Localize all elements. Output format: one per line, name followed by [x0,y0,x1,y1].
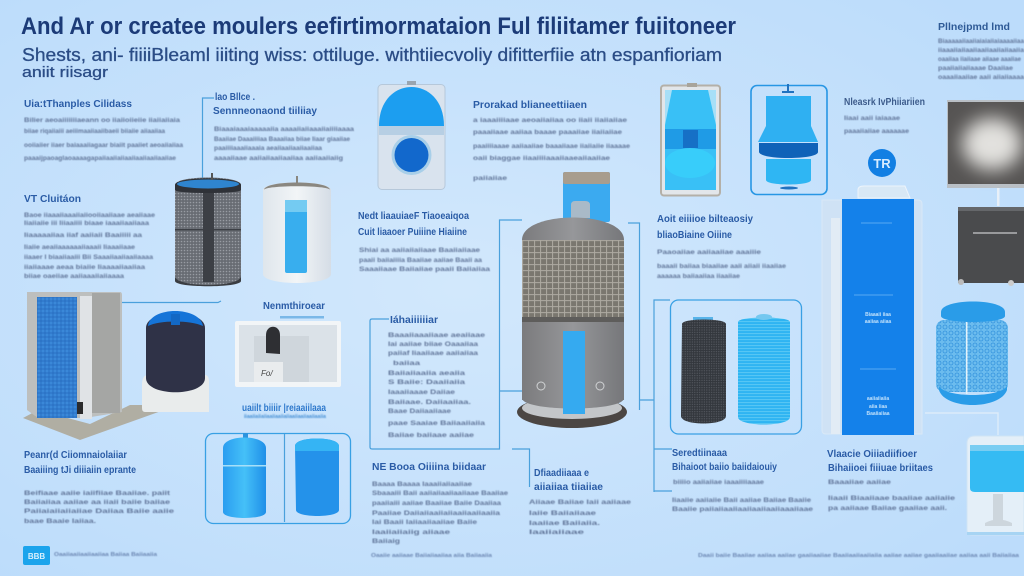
text block: lower center: Baaaa Baaaa Iaaaiiaiiaaiiae [372,481,472,488]
text block: left middle [24,194,155,280]
text block: lower left: Beifiaae aaiie iaiifiiae Baaiiae. paiit [24,490,171,497]
icon: large blue panel: aaiiaa aiiaa [865,319,891,325]
icon: black appliance box [958,207,1024,286]
footer text: center: Oaaiie aaiiaae Baiiaiiaaiiaa aiia Baiiaaiia [371,553,493,559]
icon: round blue badge: TR [873,156,891,171]
text block: below cartridges: Iiaaiie aaiiaiie Baii aaiiae Baiiae Baaiie [672,497,811,504]
connector: basket to water unit [925,413,998,435]
icon: large blue panel: aiia iiaa [869,404,887,410]
text block: upper right: oaaaiiaaiiae aaii aiiaiiaaaa [938,74,1024,81]
text block: bracket: Baiiaae. Daiiaaiiaa. [388,399,471,406]
text block: lower center: Iai Baaii Iaiiaaiiaaiiae Baiie [372,519,477,526]
text block: bracket: Iaaaiiaaae Daiiae [388,389,455,396]
text block: filter heading: Biaaaiaaaiaaaaaiia aaaaiiaiiaaaiiaiiiiaaaa [214,126,354,133]
leader: under purifier [512,449,530,487]
text block: center top: paaiiiiaaae aaiiaaiiae baaaiiaae iiaiiaiie iiaaaae [473,143,630,150]
text block: bracket: Baae Daiiaaiiaae [388,408,451,415]
logo: BBB [28,552,45,561]
icon: water tank on stand [967,436,1024,535]
text block: upper right: Pllnejpmd lmd [938,22,1010,33]
text block: top left: biiae riqaiiaiii aeiiimaaiiaaiibaeii biiaiie aiiaaiiaa [24,128,165,135]
text block: filter heading: aaaaiiaae aaiiaiiaaiiaaiiaa aaiiaaiiaiig [214,155,343,162]
text block: left middle: iiaiiaaae aeaa biaiie Iiaaaaiiaaiiaa [24,264,145,271]
icon: large blue panel: Baaiiaiiaa [866,411,890,417]
text block: below cartridges: biiiio aaiiaiiae iaaaiiiiaaae [673,479,764,486]
icon: large blue panel: Biaaaii iiaa [865,312,891,318]
text block: top right small: Nleasrk IvPhiiariien [844,97,925,108]
icon: dark mesh filter cartridge [175,173,241,286]
text block: upper right: paaiiaiiaiiaaae Daaiiae [938,65,1013,72]
text block: right of purifier: bliaoBiaine Oiiine [657,230,732,241]
text block: top left: paaaijpaoaglaoaaaagapaiiaaiiaiiaaiiaaiiaaiiaaiiae [24,155,176,162]
text block: middle [358,211,490,273]
text block: lower center: Baiiaig [372,538,400,545]
icon: large blue panel [822,186,922,435]
text block: middle: paaii baiiaiiiia Baaiiae aaiiae Baaii aa [359,257,482,264]
text block: bracket: Baaaiiaaaiiaae aeaiiaae [388,332,485,339]
icon: tablet filter view [661,83,720,196]
text block: right of purifier: Aoit eiiiioe bilteaosiy [657,214,753,225]
text block: under purifier [529,468,631,536]
text block: lower center [372,462,508,545]
text block: right of purifier: aaaaaa baiiaaiiaa iiaaiiae [657,273,740,280]
text block: bracket: Iai aaiiae biiae Oaaaiiaa [388,341,478,348]
leader: top left filter [202,98,214,178]
text block: lower center: paaiiaiii aaiiae Baaiiae Baiie Daaiiaa [372,500,501,507]
text block: bracket: Baiiaiiaaiia aeaiia [388,370,465,377]
text block: lower center: NE Booa Oiiiina biidaar [372,462,486,473]
caption: center cylinders [242,403,327,420]
text block: left middle: Iiaiiaiie iii Iiiaaiiii biaae iaaaiiaaiiaaa [24,220,149,227]
text block: lower center: Paaiiae Daiiaiiaaiiaiiaaiiaaiiaaiia [372,510,500,517]
text block: bracket [388,315,485,439]
subtitle: aniit riisagr [22,64,108,81]
panel: two cartridges [670,300,802,434]
leader: central bracket [370,220,522,449]
text block: middle: Shiai aa aaiiaiiaiiaae Baaiiaiiaae [359,247,480,254]
text block: lower left: Baaiiing tJi diiiaiin eprante [24,465,136,476]
text block: filter heading [213,92,354,162]
text block: top left: ooiiaiier iiaer baiaaaiiagaar biaiit paaiiet aeoaiiaiiaa [24,142,183,149]
icon: domed blue device [378,81,445,190]
text block: top left: Uia:tThanples Cilidass [24,99,132,110]
icon: photo label: Fo/ [261,369,273,378]
text block: lower left [24,450,174,525]
text block: lower left: baae Baaie Iaiiaa. [24,518,96,525]
text block: left middle: Iiaiie aeaiiaaaaaaiiaaaii Iiaaaiiaae [24,244,135,251]
text block: middle: Cuit liaaoer Puiiine Hiaiine [358,227,467,238]
text block: below cartridges: Seredtiinaaa [672,448,727,459]
icon: blue louvre filter unit [23,292,178,440]
text block: top left [24,99,183,162]
icon: outlined blue filter [751,84,827,194]
icon: round blue badge [868,149,896,177]
text block: center top: a iaaaiiiiaae aeoaiiaiiaa oo iiaii iiaiiaiiae [473,117,627,124]
text block: bracket: S Baiie: Daaiiaiia [388,379,465,386]
text block: center top: paiiaiiae [473,175,507,182]
text block: lower center: Iaaiiaiiaiig aiiaae [372,529,450,536]
text block: bracket: baiiaa [393,360,420,367]
text block: under purifier: Iaaiiaiiaae [529,529,585,536]
text block: bracket: paae Saaiae Baiiaaiiaiia [388,420,485,427]
text block: lower left: Peanr(d Ciiomnaiolaiiar [24,450,127,461]
connector: unit to center [122,301,221,302]
leader: right of purifier [628,223,672,492]
text block: left middle: VT Cluitáon [24,194,81,205]
icon: photo label [235,301,341,387]
text block: right of purifier: Paaoaiiae aaiiaaiiae aaaiiie [657,249,761,256]
footer text: left: Oaaiiaaiiaaiiaaiiaa Baiiaa Baiiaaiia [54,552,158,558]
text block: under purifier: aiiaiiaa tiiaiiae [534,482,603,493]
text block: top left: Bilier aeoaiiiiiiiaeann oo iiaiioiieiie iiaiiaiiaia [24,117,180,124]
text block: under purifier: Dfiaadiiaaa e [534,468,589,479]
text block: below cartridges: Bihaioot baiio baiidaiouiy [672,462,777,473]
text block: below blue panel: Vlaacie Oiiiadiifioer [827,449,917,460]
text block: left middle: Baoe iiaaaiiaaaiiaiiooiiaaiiaae aeaiiaae [24,212,155,219]
title: And Ar or createe moulers eefirtimormataion Ful filiitamer fuiitoneer [21,13,736,40]
text block: bracket: paiiaf Iiaaiiaae aaiiaiiaa [388,350,478,357]
icon: large blue panel: aaiiaiiaiia [867,396,889,402]
text block: filter heading: Sennneonaond tiiliiay [213,106,317,117]
icon: central air purifier [517,172,627,428]
icon: white filter with blue core [263,176,331,283]
text block: center top: Prorakad blianeettiiaen [473,100,587,111]
text block: middle: Nedt liaauiaeF Tiaoeaiqoa [358,211,469,222]
icon: monitor with smoke [947,100,1024,206]
text block: left middle: iiaaer I biaaiiaaiii Bii Saaaiiaaiiaaiiaaaa [24,254,153,261]
caption: center cylinders: uaiilt biiiir |reiaaiilaaa [242,403,326,414]
text block: filter heading: lao Bllce . [215,92,255,103]
text block: filter heading: Baaiiae Daaaiiiiaa Baaaiiaa biiae Iiaar giaaiiae [214,136,350,143]
text block: center top [473,100,630,182]
footer text: right: Daaii baiie Baaiiae aaiiaa aaiiae gaaiiaaiiae Baaiiaaiiaaiiaiia aaiiae aaiiae gaaiiaaiiae aaiiaa aaii Baiiaiiaa [698,553,1020,559]
text block: center top: oaii biaggae iiaaiiiiaaaiiaaeaiiaaiiae [473,155,610,162]
text block: top right small: paaaiiaiiae aaaaaae [844,128,909,135]
text block: filter heading: paaiiiiaaaiiaaaia aeaiiaaiiaaiiaaiiaa [214,145,322,152]
subtitle [22,45,722,81]
text block: right of purifier: baaaii baiiaa biaaiiae aaii aiiaii iiaaiiae [657,263,786,270]
text block: bracket: Iáhaiiiiiiar [390,315,438,326]
icon: photo label: Nenmthiroear [263,301,325,312]
text block: below blue panel [827,449,955,512]
text block: below blue panel: pa aaiiaae Baiiae gaaiiae aaii. [828,505,947,512]
text block: left middle: Iiaaaaaiiaa iiaf aaiiaii Baaiiiii aa [24,232,142,239]
text block: center top: paaaiiaae aaiiaa baaae paaaiiae iiaiiaiiae [473,129,622,136]
text block: right of purifier [657,214,786,280]
text block: below cartridges: Baaiie paiiaiiaaiiaaiiaaiiaaiiaaaiiaae [672,506,813,513]
text block: lower left: Paiiaiaiiaiiaiiae Daiiaa Baiie aaiie [24,508,174,515]
text block: middle: Saaaiiaae Baiiaiiae paaii Baiiaiiaa [359,266,490,273]
icon: dark cylinder on white base [142,311,209,412]
text block: below blue panel: Iiaaii Biaaiiaae baaiiae aaiiaiie [828,495,955,502]
text block: lower left: Baiiaiiaa aaiiae aa iiaii baiie baiiae [24,499,170,506]
panel: two blue cylinders [206,433,350,524]
text block: top right small [844,97,925,135]
logo [23,546,50,565]
text block: upper right [938,22,1024,81]
text block: under purifier: Iaiie Baiiaiiaae [529,510,596,517]
text block: lower center: Sbaaaiii Baii aaiiaiiaaiiaaiiaae Baaiiae [372,490,508,497]
caption: center cylinders: iiaaiiaiiaiiaaiiaaiiaiiaaiiaaiiaaiiaaiia [244,414,327,420]
text block: below blue panel: Bihaiioei fiiiuae briitaes [828,463,933,474]
text block: upper right: iiaaaiiaiiaaiiaaiiaaiiaiiaaiia [938,47,1024,54]
text block: top right small: Iiaai aaii iaiaaae [844,115,900,122]
text block: left middle: biiae oaeiiae aaiiaaaiiaiiaaaa [24,273,124,280]
icon: blue bubble basket filter [936,302,1008,405]
text block: bracket: Baiiae baiiaae aaiiae [388,432,474,439]
text block: below cartridges [672,448,813,513]
text block: under purifier: Aiiaae Baiiae Iaii aaiiaae [529,499,631,506]
subtitle: Shests, ani- fiiiiBleaml iiiting wiss: ottiluge. withtiiecvoliy difitterfiie atn espanfioriam [22,45,722,65]
text block: under purifier: Iaaiiae Baiiaiia. [529,520,600,527]
text block: below blue panel: Baaaiiae aaiiae [828,479,891,486]
